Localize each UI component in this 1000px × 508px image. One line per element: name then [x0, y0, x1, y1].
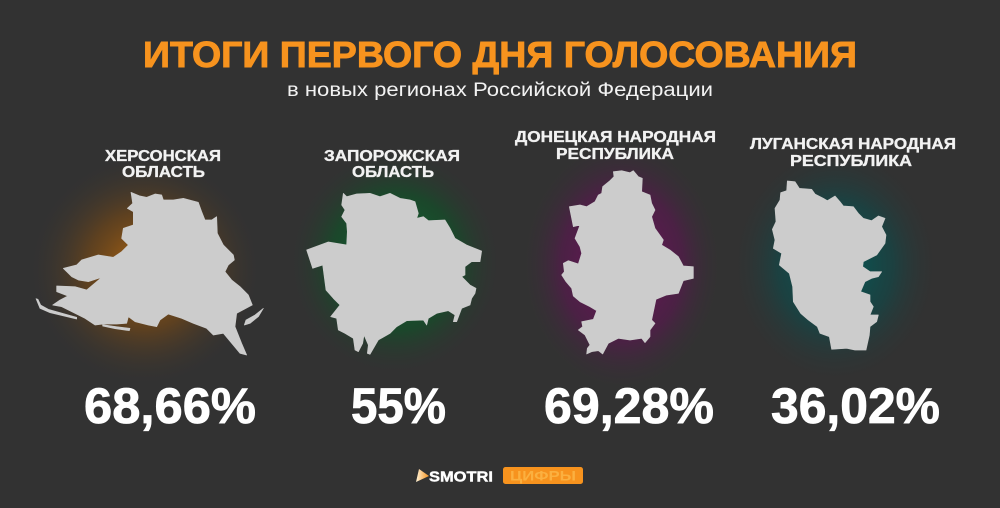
label: Kherson — [105, 148, 221, 181]
badge background — [503, 467, 583, 484]
label: Luhansk — [750, 136, 956, 170]
map: Donetsk — [562, 171, 693, 354]
label: Zaporozhye: ОБЛАСТЬ — [352, 164, 434, 181]
logo text: SMOTRI — [429, 470, 493, 486]
label: Donetsk: РЕСПУБЛИКА — [556, 146, 674, 163]
panel: Donetsk republic — [515, 129, 724, 393]
panel: Kherson region — [27, 148, 263, 388]
label: Luhansk: ЛУГАНСКАЯ НАРОДНАЯ — [750, 136, 956, 153]
label: Donetsk: ДОНЕЦКАЯ НАРОДНАЯ — [515, 129, 716, 146]
glow: Donetsk — [520, 137, 724, 393]
panel: Luhansk republic — [730, 136, 956, 385]
result: Kherson: 68,66% — [84, 378, 256, 434]
glow: Zaporozhye — [287, 147, 503, 377]
badge text: ЦИФРЫ — [510, 468, 576, 484]
title: ИТОГИ ПЕРВОГО ДНЯ ГОЛОСОВАНИЯ — [143, 34, 857, 75]
result: Zaporozhye: 55% — [351, 378, 446, 434]
glow: Kherson — [27, 152, 263, 388]
map: Kherson — [36, 192, 263, 355]
label: Luhansk: РЕСПУБЛИКА — [790, 153, 912, 170]
label: Donetsk — [515, 129, 716, 163]
panel: Zaporozhye region — [287, 147, 503, 377]
badge: Tsifry — [503, 467, 583, 484]
label: Zaporozhye — [324, 148, 460, 181]
icon: play triangle — [416, 469, 429, 482]
result: Luhansk: 36,02% — [771, 378, 940, 434]
label: Kherson: ОБЛАСТЬ — [122, 164, 205, 181]
glow: Luhansk — [730, 145, 940, 385]
label: Zaporozhye: ЗАПОРОЖСКАЯ — [324, 148, 460, 165]
result: Donetsk: 69,28% — [544, 378, 714, 434]
map: Zaporozhye — [307, 193, 482, 354]
subtitle: в новых регионах Российской Федерации — [287, 80, 713, 101]
logo: Smotri — [416, 469, 493, 486]
map: Luhansk — [772, 181, 886, 350]
label: Kherson: ХЕРСОНСКАЯ — [105, 148, 221, 165]
